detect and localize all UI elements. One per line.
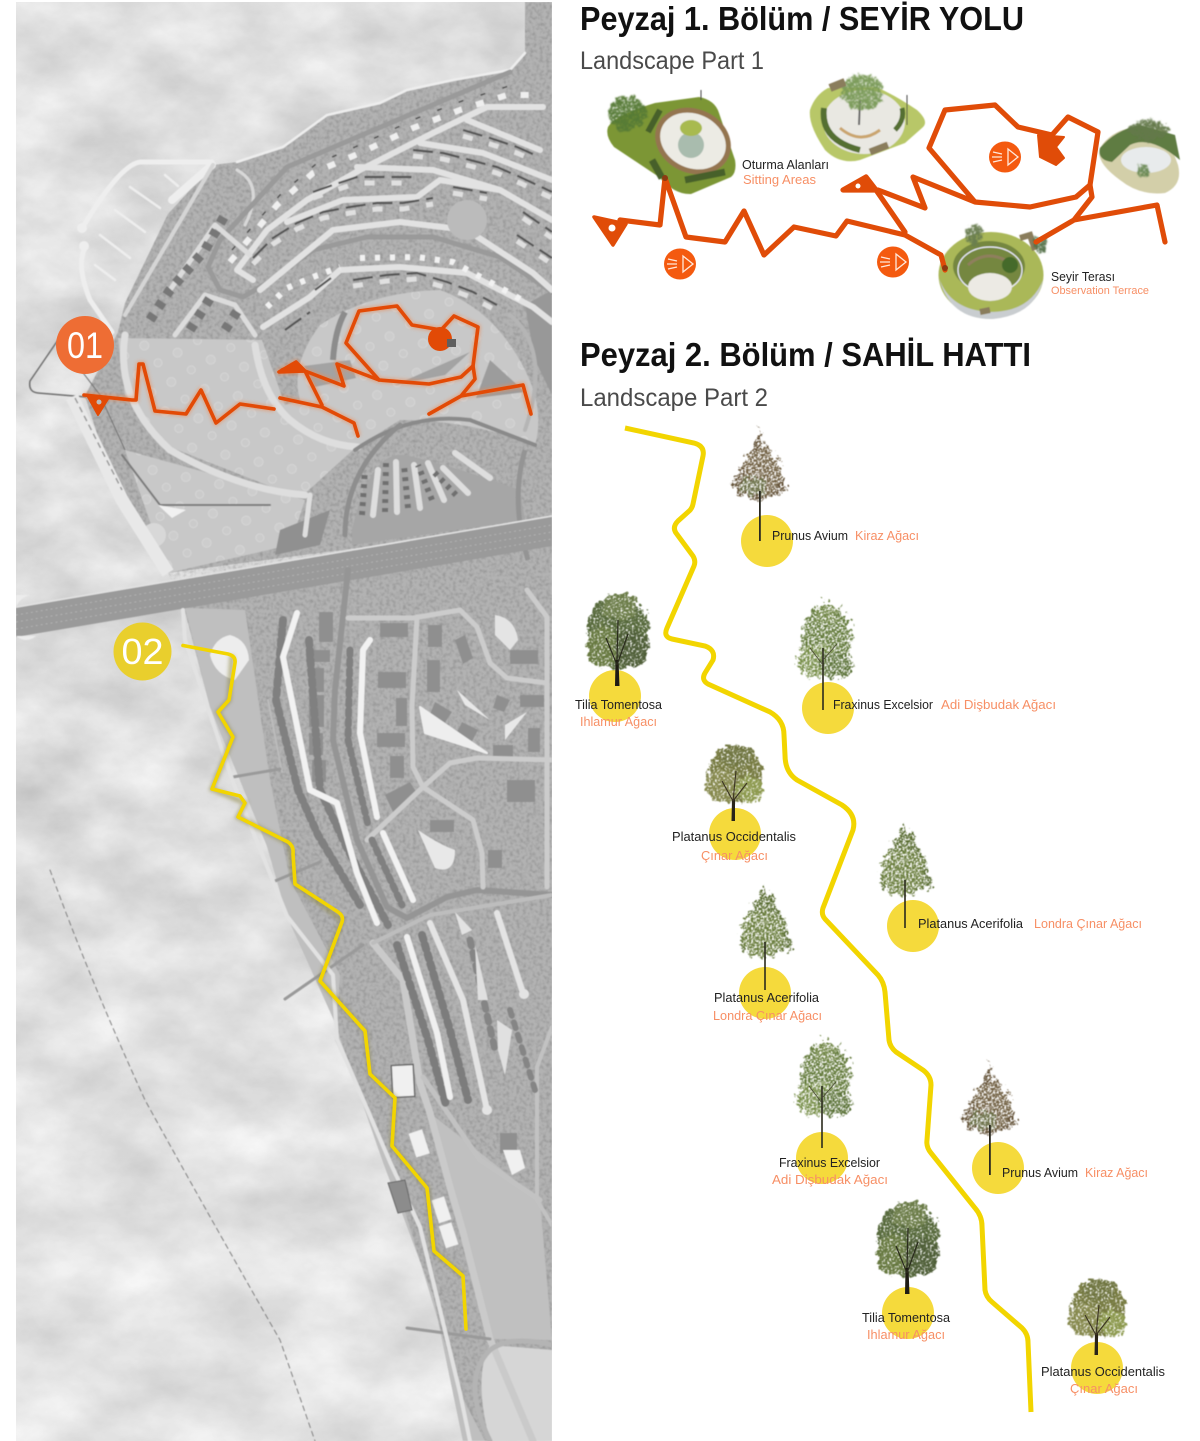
- tree: Platanus Occidentalis 1: [672, 745, 796, 863]
- tree: Platanus Acerifolia 1: Platanus Acerifolia: [918, 916, 1024, 931]
- route 01 glow on map: [84, 306, 531, 436]
- panel: grayscale site plan map: [16, 2, 552, 1441]
- pier promontory outline: [30, 340, 168, 573]
- housing rows north: [150, 86, 552, 330]
- tree: Tilia Tomentosa 1: Tilia Tomentosa: [575, 697, 663, 712]
- icon: direction badge 1: [664, 248, 696, 280]
- tree: Prunus Avium 2: Kiraz Ağacı: [1085, 1165, 1148, 1180]
- tree: Platanus Acerifolia 2: Londra Çınar Ağacı: [713, 1008, 822, 1023]
- badge 01: 01: [67, 325, 103, 366]
- illustration: pond garden: [1099, 120, 1180, 193]
- illustration: observation terrace: [938, 225, 1047, 319]
- park lawns: [118, 290, 552, 1441]
- tree: Platanus Acerifolia 1: [878, 824, 1142, 952]
- highway: [16, 516, 552, 640]
- tree: Platanus Acerifolia 2: [713, 886, 822, 1023]
- tree: Fraxinus Excelsior 1: Fraxinus Excelsior: [833, 697, 934, 712]
- route 02 on map: [183, 646, 466, 1329]
- icon: direction badge 3: [989, 142, 1021, 172]
- tree: Platanus Occidentalis 2: Platanus Occidentalis: [1041, 1364, 1165, 1379]
- tree: Prunus Avium 2: [961, 1063, 1148, 1194]
- heading: landscape part 2: [580, 336, 1031, 412]
- tree: Platanus Occidentalis 2: [1041, 1279, 1165, 1396]
- marina piers: [77, 53, 525, 332]
- illustration: sitting area plaza: [607, 90, 742, 194]
- land grain texture: [85, 2, 552, 1441]
- badge 02: 02: [122, 631, 164, 672]
- tree: Prunus Avium 1: Prunus Avium: [772, 528, 848, 543]
- icon: direction badge 2: [877, 246, 909, 278]
- route diagram: part 2 yellow path: [625, 428, 1031, 1412]
- badge 02: [114, 622, 172, 680]
- label: observation terrace: Seyir Terası: [1051, 269, 1115, 284]
- heading: landscape part 1: Landscape Part 1: [580, 47, 764, 75]
- badge 01: [56, 316, 114, 374]
- heading: landscape part 2: Landscape Part 2: [580, 384, 768, 412]
- route 02 glow on map: [212, 655, 463, 1276]
- label: sitting areas: [742, 157, 829, 187]
- icon: direction badges: [664, 142, 1021, 280]
- tree: Platanus Occidentalis 1: Platanus Occidentalis: [672, 829, 796, 844]
- south district streets: [50, 570, 552, 1441]
- illustration: sitting circle: [810, 74, 925, 161]
- tree: Tilia Tomentosa 2: Tilia Tomentosa: [862, 1310, 951, 1325]
- tree: Prunus Avium 1: [731, 429, 919, 567]
- label: sitting areas: Sitting Areas: [743, 172, 816, 187]
- tree: Prunus Avium 2: Prunus Avium: [1002, 1165, 1078, 1180]
- south district blocks: [306, 612, 544, 1153]
- amphitheatre circle: [447, 200, 487, 240]
- label: observation terrace: [1051, 269, 1149, 297]
- route diagram: part 1 orange path: [594, 105, 1165, 271]
- tree: Fraxinus Excelsior 2: Fraxinus Excelsior: [779, 1155, 881, 1170]
- tree: Platanus Acerifolia 2: Platanus Acerifolia: [714, 990, 820, 1005]
- tree: Platanus Occidentalis 1: Çınar Ağacı: [701, 848, 768, 863]
- north district roads: [170, 72, 552, 335]
- tree: Tilia Tomentosa 1: [575, 593, 663, 729]
- tree: Tilia Tomentosa 2: [862, 1201, 951, 1342]
- label: sitting areas: Oturma Alanları: [742, 157, 829, 172]
- park roads: [122, 315, 536, 535]
- heading: landscape part 2: Peyzaj 2. Bölüm / SAHİL HATTI: [580, 336, 1031, 373]
- tree: Platanus Occidentalis 2: Çınar Ağacı: [1070, 1381, 1138, 1396]
- tree: Fraxinus Excelsior 1: [796, 601, 1056, 734]
- heading: landscape part 1: Peyzaj 1. Bölüm / SEYİR YOLU: [580, 0, 1024, 37]
- park pavilions and southern cluster: [142, 450, 528, 560]
- golf ponds and courts: [210, 615, 527, 1248]
- tree: Tilia Tomentosa 1: Ihlamur Ağacı: [580, 714, 657, 729]
- tree: Platanus Acerifolia 1: Londra Çınar Ağacı: [1034, 916, 1142, 931]
- label: observation terrace: Observation Terrace: [1051, 285, 1149, 297]
- tree: Fraxinus Excelsior 2: Adi Dişbudak Ağacı: [772, 1172, 888, 1187]
- land masses: [85, 2, 552, 1441]
- heading: landscape part 1: [580, 0, 1024, 75]
- tree: Tilia Tomentosa 2: Ihlamur Ağacı: [867, 1327, 945, 1342]
- tree: Prunus Avium 1: Kiraz Ağacı: [855, 528, 919, 543]
- tree: Fraxinus Excelsior 1: Adi Dişbudak Ağacı: [941, 697, 1056, 712]
- route 01 on map: [84, 306, 531, 436]
- tree: Fraxinus Excelsior 2: [772, 1039, 888, 1187]
